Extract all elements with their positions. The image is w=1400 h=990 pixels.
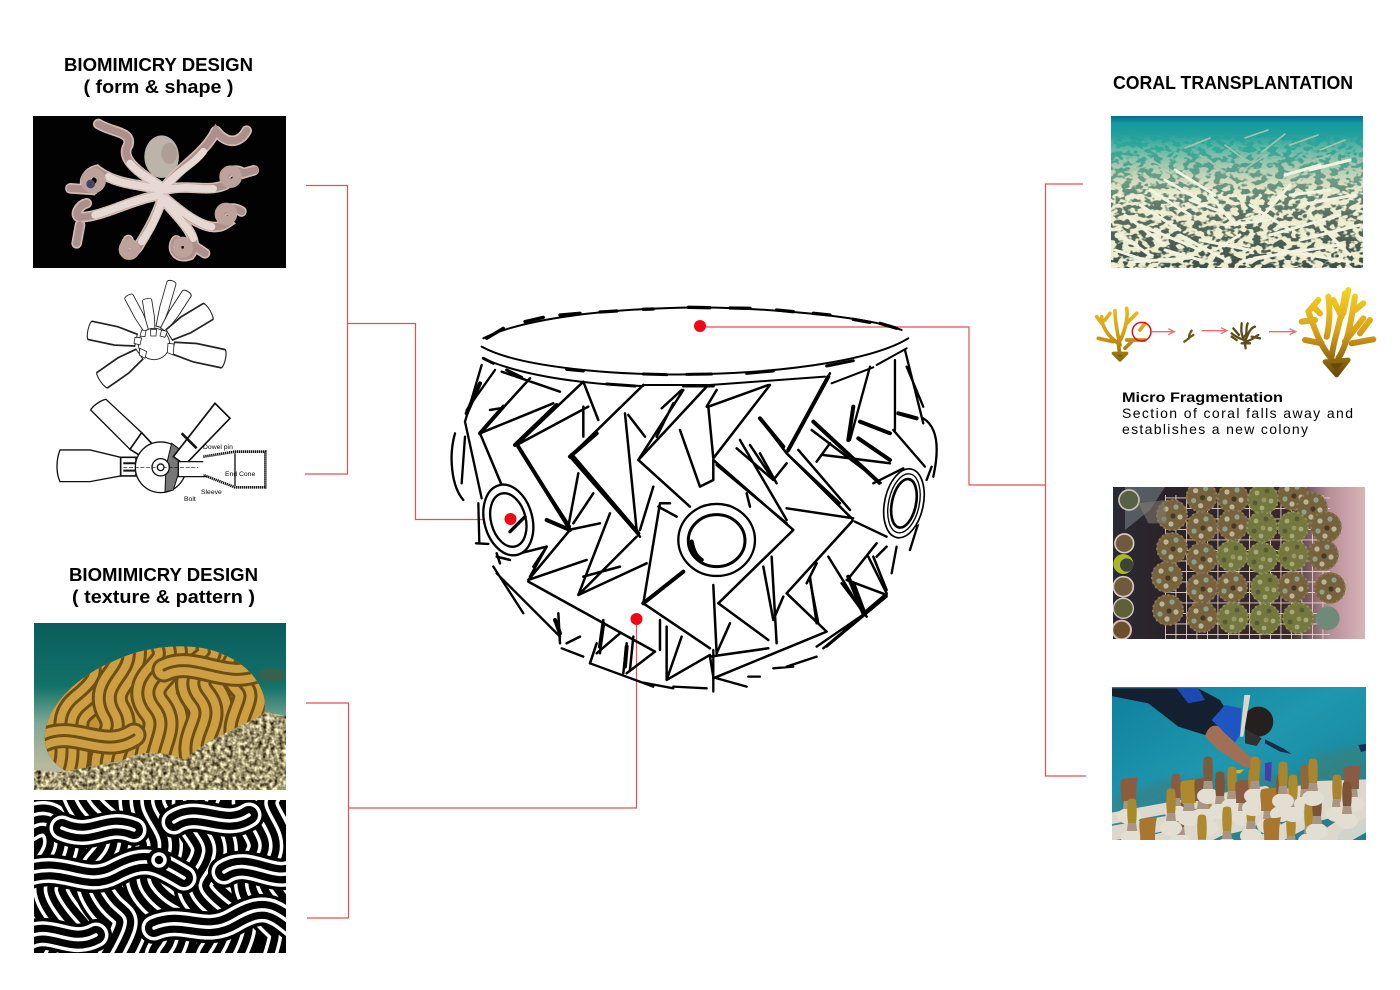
heading: biomimicry design texture and pattern: BIOMIMICRY DESIGN [69,564,258,585]
connector: right bracket [700,184,1086,776]
arrow two [1202,328,1227,334]
fragment [1184,331,1193,342]
marker: rim dot [694,320,706,332]
diagram: octahedral joint with tubes [86,279,227,389]
caption: micro fragmentation: establishes a new colony [1122,421,1308,437]
connector: left lower bracket [306,619,636,918]
photo: coral nursery grid [1112,480,1365,639]
tube: right [853,465,930,542]
diagram: joint section with labels [57,399,265,503]
heavy accent strokes [467,377,917,667]
tube: left [476,479,541,561]
highlight circle [1132,322,1151,341]
arrow three [1269,329,1296,335]
diver [1112,688,1366,782]
coral: grown colony [1302,290,1373,375]
bowl sketch with zigzag origami pattern [452,307,937,692]
heading: biomimicry design texture and pattern: ( texture & pattern ) [72,586,255,607]
caption: micro fragmentation: Micro Fragmentation [1122,390,1283,405]
diagram: joint section with labels: End Cone [225,471,255,478]
zigzag folds [480,372,890,680]
caption: micro fragmentation [1122,390,1353,437]
photo: octopus on black [33,116,286,268]
young colony [1232,323,1260,348]
heading: coral transplantation: CORAL TRANSPLANTATION [1113,72,1353,93]
arrow one [1152,329,1174,335]
diagram: micro fragmentation coral stages [1097,290,1373,375]
pattern: labyrinth maze texture [34,800,286,953]
connector: left upper bracket [305,186,510,520]
diagram: joint section with labels: Dowel pin [203,444,233,451]
heading: biomimicry design form and shape: ( form & shape ) [84,76,234,97]
heading: biomimicry design texture and pattern [69,564,258,607]
marker: joint dot [504,513,516,525]
coral stalks [1119,756,1361,840]
tube: center [678,504,755,576]
photo: bleached staghorn coral [1111,116,1363,268]
diagram: joint section with labels: Sleeve [201,489,222,496]
marker: texture dot [630,613,642,625]
heading: biomimicry design form and shape [64,54,253,97]
bowl outline [452,350,937,692]
pipes [1112,787,1368,847]
photo: diver planting coral on pipes [1112,687,1366,840]
heading: biomimicry design form and shape: BIOMIMICRY DESIGN [64,54,253,75]
photo: brain coral [34,623,286,790]
diagram: joint section with labels: Bolt [184,496,196,503]
caption: micro fragmentation: Section of coral falls away and [1122,405,1353,421]
coral: parent colony [1097,308,1145,360]
rim ellipse [482,307,908,386]
